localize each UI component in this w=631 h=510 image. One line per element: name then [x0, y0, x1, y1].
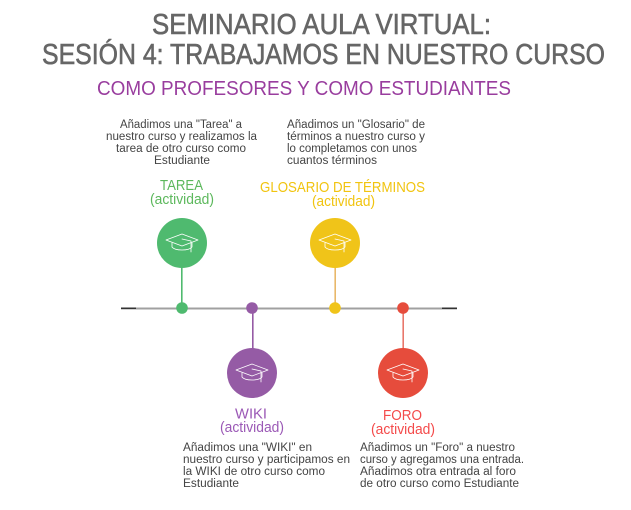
- panel: glosario: [260, 119, 425, 314]
- glosario circle icon: [310, 218, 360, 268]
- foro description: [360, 442, 524, 490]
- panel: wiki: [183, 302, 350, 490]
- tarea heading: TAREA: [160, 178, 203, 194]
- wiki circle icon: [227, 348, 277, 398]
- foro description: de otro curso como Estudiante: [360, 478, 519, 490]
- foro timeline dot: [397, 302, 409, 314]
- foro heading: [371, 408, 435, 438]
- tarea description: Estudiante: [154, 155, 210, 167]
- wiki description: Estudiante: [183, 478, 239, 490]
- wiki description: Añadimos una "WIKI" en: [183, 442, 312, 454]
- foro description: curso y agregamos una entrada.: [360, 454, 524, 466]
- tarea heading: (actividad): [150, 192, 214, 208]
- tarea connector: [181, 266, 183, 304]
- timeline axis: [121, 308, 457, 310]
- wiki description: [183, 442, 350, 490]
- glosario timeline dot: [329, 302, 341, 314]
- tarea description: [106, 119, 258, 167]
- wiki heading: [220, 406, 284, 436]
- foro description: Añadimos otra entrada al foro: [360, 466, 516, 478]
- wiki timeline dot: [246, 302, 258, 314]
- foro circle icon: [378, 348, 428, 398]
- title: SEMINARIO AULA VIRTUAL:: [152, 9, 491, 41]
- tarea timeline dot: [176, 302, 188, 314]
- glosario description: cuantos términos: [287, 155, 377, 167]
- wiki connector: [252, 312, 254, 350]
- foro heading: (actividad): [371, 422, 435, 438]
- glosario heading: GLOSARIO DE TÉRMINOS: [260, 179, 425, 196]
- glosario description: [287, 119, 425, 167]
- glosario description: términos a nuestro curso y: [287, 131, 425, 143]
- tarea circle icon: [157, 218, 207, 268]
- panel: tarea: [106, 119, 258, 314]
- tarea description: nuestro curso y realizamos la: [106, 131, 258, 143]
- title: [42, 9, 605, 71]
- wiki description: la WIKI de otro curso como: [183, 466, 325, 478]
- foro connector: [402, 312, 404, 350]
- foro description: Añadimos un "Foro" a nuestro: [360, 442, 515, 454]
- glosario heading: (actividad): [312, 194, 375, 210]
- tarea description: tarea de otro curso como: [116, 143, 246, 155]
- wiki heading: WIKI: [235, 406, 267, 422]
- wiki heading: (actividad): [220, 420, 284, 436]
- tarea description: Añadimos una "Tarea" a: [120, 119, 243, 131]
- panel: foro: [360, 302, 524, 490]
- tarea heading: [150, 178, 214, 208]
- glosario heading: [260, 179, 425, 210]
- subtitle: COMO PROFESORES Y COMO ESTUDIANTES: [97, 78, 511, 100]
- glosario connector: [334, 266, 336, 304]
- wiki description: nuestro curso y participamos en: [183, 454, 350, 466]
- foro heading: FORO: [383, 408, 422, 424]
- glosario description: Añadimos un "Glosario" de: [287, 119, 425, 131]
- glosario description: lo completamos con unos: [287, 143, 417, 155]
